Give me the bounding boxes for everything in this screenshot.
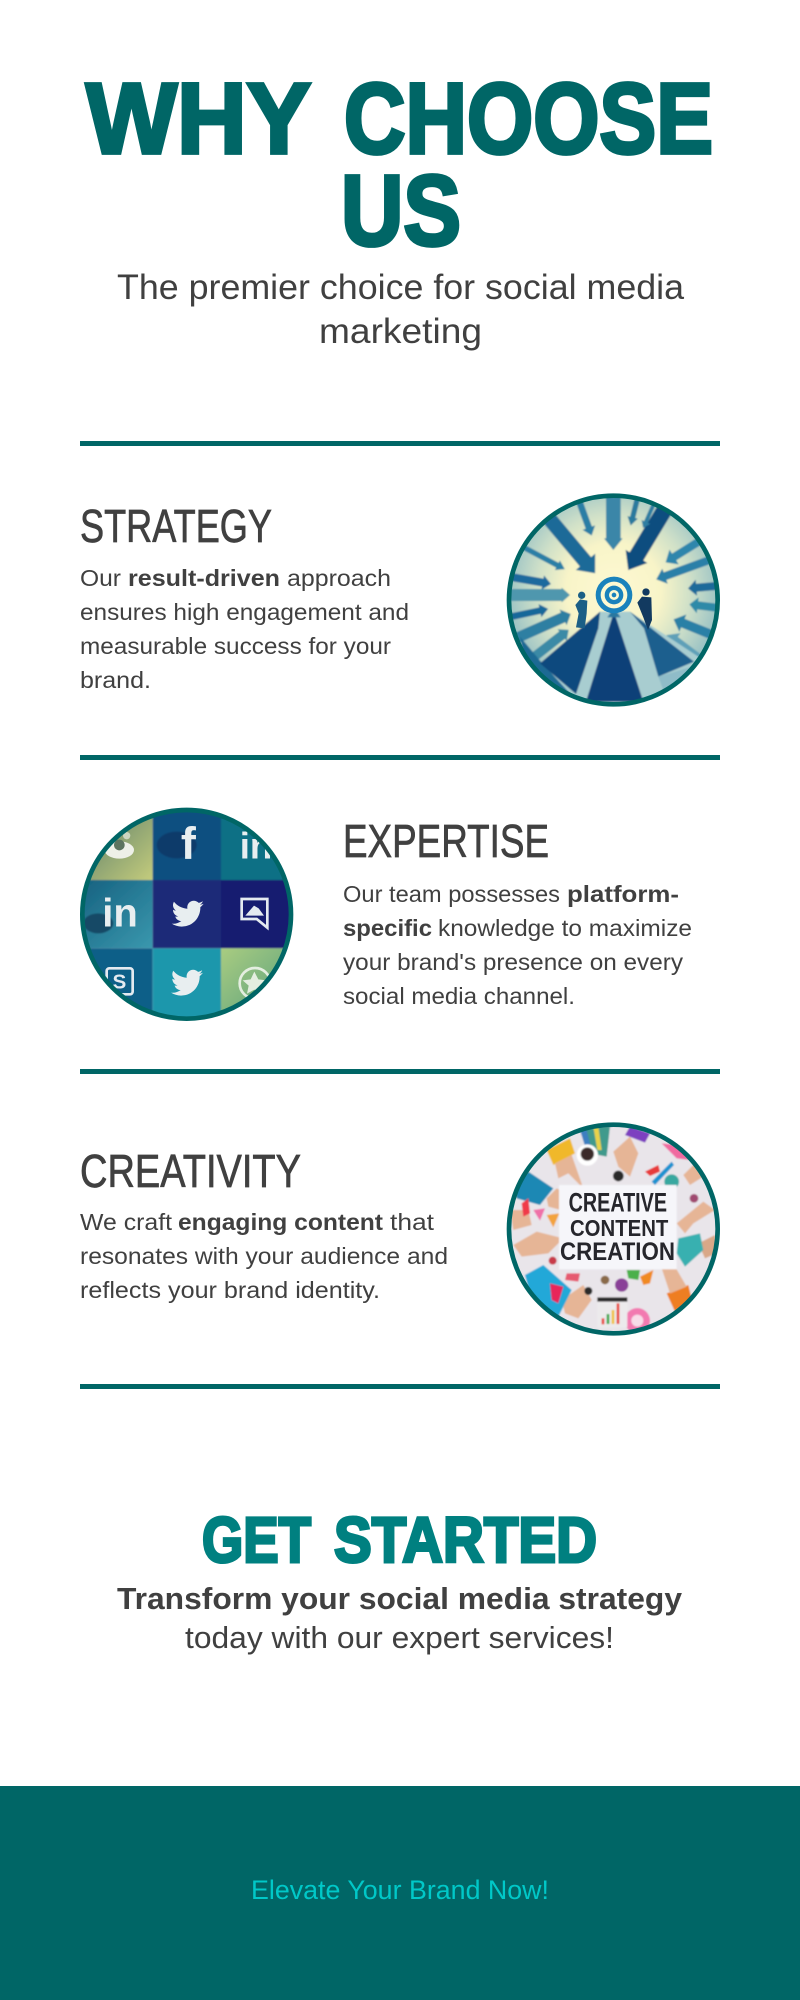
heading: get started [202, 1504, 597, 1576]
text block: strategy: ensures high engagement and [80, 599, 409, 625]
sign text [560, 1192, 674, 1260]
sleeves [547, 1138, 575, 1165]
icon: green bubble [240, 968, 270, 999]
title: US [341, 155, 461, 267]
text block: creativity [80, 1209, 448, 1303]
text block: creativity: We craft [80, 1209, 172, 1235]
text block: creativity: reflects your brand identity. [80, 1277, 380, 1303]
subtitle [117, 268, 685, 351]
icon: social media grid: in [240, 825, 272, 866]
icon: bullseye [596, 577, 632, 613]
sign text: CONTENT [570, 1215, 668, 1241]
text block: strategy: Our [80, 565, 121, 591]
call to action text [117, 1581, 683, 1655]
icon: social media grid [78, 805, 298, 1025]
cup [577, 1144, 598, 1166]
divider [80, 1069, 720, 1074]
heading: creativity: CREATIVITY [80, 1145, 301, 1197]
text block: expertise: knowledge to maximize [438, 915, 692, 941]
text block: strategy: approach [287, 565, 391, 591]
call to action text: Transform your social media strategy [117, 1581, 683, 1616]
colourful bits [525, 1265, 572, 1323]
icon: creative content creation photo [503, 1120, 723, 1340]
text block: strategy [80, 565, 409, 693]
text block: strategy: brand. [80, 667, 151, 693]
hands [555, 1155, 583, 1188]
divider [80, 441, 720, 446]
divider [80, 755, 720, 760]
text block: expertise [343, 881, 692, 1009]
sign text: CREATION [560, 1238, 675, 1266]
text block: expertise: platform- [567, 881, 679, 907]
panel: creativity [80, 1120, 723, 1340]
text block: creativity: resonates with your audience and [80, 1243, 448, 1269]
heading: expertise: EXPERTISE [343, 815, 549, 867]
text block: expertise: your brand's presence on every [343, 949, 683, 975]
pencils [583, 1127, 610, 1157]
panel: strategy [80, 482, 727, 713]
title: WHY [86, 63, 311, 175]
text block: expertise: Our team possesses [343, 881, 560, 907]
icon: linked logos: in [102, 892, 138, 936]
text block: strategy: measurable success for your [80, 633, 391, 659]
footer band [0, 1786, 800, 2000]
icon: left figure [575, 592, 587, 628]
subtitle: marketing [319, 312, 482, 351]
icon: facebook: f [181, 818, 197, 869]
icon: s square [107, 968, 133, 994]
icon: right figure [637, 588, 652, 630]
divider [80, 1384, 720, 1389]
heading: get started: STARTED [334, 1504, 597, 1576]
icon: photo [242, 899, 267, 928]
heading: get started: GET [202, 1504, 311, 1576]
footer text: Elevate Your Brand Now! [251, 1875, 549, 1905]
icon: top-left blob [105, 832, 134, 859]
heading: strategy: STRATEGY [80, 500, 272, 552]
text block: creativity: engaging content [178, 1209, 383, 1235]
subtitle: The premier choice for social media [117, 268, 685, 307]
text block: creativity: that [390, 1209, 435, 1235]
chart [624, 1312, 628, 1328]
icon: target and arrows illustration [506, 493, 720, 707]
icon: twitter birds [171, 901, 204, 996]
panel: expertise [78, 805, 692, 1025]
text block: strategy: result-driven [128, 565, 280, 591]
text block: expertise: social media channel. [343, 983, 575, 1009]
call to action text: today with our expert services! [185, 1620, 614, 1655]
icon: s square: S [112, 970, 126, 993]
text block: expertise: specific [343, 915, 432, 941]
sign text: CREATIVE [569, 1188, 667, 1218]
title: CHOOSE [344, 63, 713, 175]
title [86, 63, 713, 267]
